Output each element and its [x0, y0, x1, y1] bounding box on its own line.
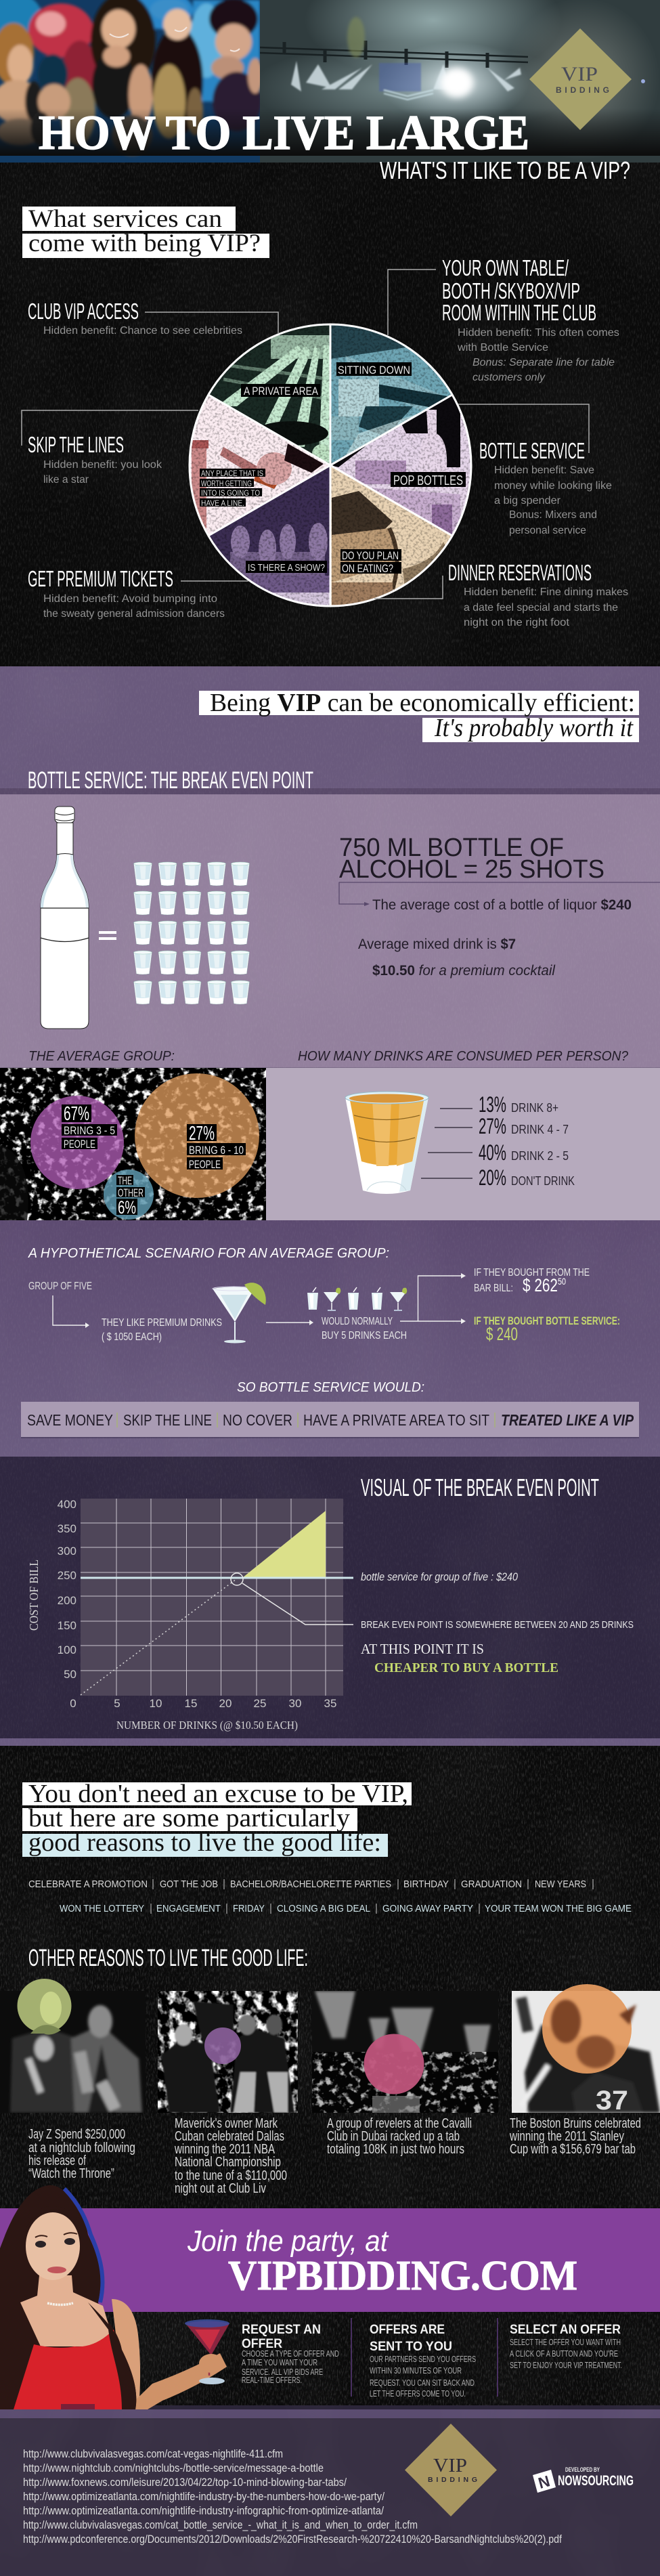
title: HOW TO LIVE LARGE: [39, 106, 529, 160]
step: request an offer: CHOOSE A TYPE OF OFFER AND: [242, 2349, 339, 2359]
callout: dinner reservations: night on the right foot: [464, 617, 570, 628]
stat: 40% drink 2-5: [428, 1140, 569, 1165]
caption: Mark Cuban: winning the 2011 NBA: [174, 2142, 275, 2157]
stat: 27% drink 4-7: [435, 1114, 569, 1138]
x axis labels: 35: [324, 1697, 336, 1710]
panel: join the party banner: VIPBIDDING.COM: [228, 2253, 577, 2299]
y axis labels: 250: [58, 1569, 76, 1582]
logo: NowSourcing: N: [536, 2472, 552, 2492]
x axis labels: 0: [70, 1697, 76, 1710]
list: reasons to celebrate: BACHELOR/BACHELORETTE PARTIES: [230, 1879, 391, 1890]
caption: Mark Cuban: night out at Club Liv: [175, 2181, 266, 2196]
heading: good reasons: You don't need an excuse to be VIP,: [28, 1780, 408, 1808]
step: five drinks each: BUY 5 DRINKS EACH: [322, 1330, 407, 1341]
stat: 750 ml bottle equals 25 shots: ALCOHOL = 25 SHOTS: [339, 855, 604, 884]
caption: Mark Cuban: Cuban celebrated Dallas: [175, 2129, 284, 2144]
callout: bottle service: [458, 404, 612, 536]
logo: NowSourcing: DEVELOPED BY: [565, 2466, 600, 2473]
text: drink cost facts: $10.50 for a premium cocktail: [372, 963, 556, 979]
header photo: women dancing: [0, 0, 263, 163]
text: sources list: http://www.foxnews.com/leisure/2013/04/22/top-10-mind-blowing-bar-tabs/: [23, 2476, 347, 2489]
text: sources list: http://www.optimizeatlanta.com/nightlife-industry-infographic-from-optimize-atlanta/: [23, 2504, 384, 2517]
x axis labels: 15: [185, 1697, 197, 1710]
outcome: bottle service: $ 240: [486, 1324, 518, 1344]
caption: Boston Bruins: [509, 2116, 641, 2157]
label: is there a show: IS THERE A SHOW?: [248, 562, 325, 574]
callout: get premium tickets: [28, 566, 248, 620]
icons: five drinks: [307, 1287, 407, 1310]
icon: cocktail glass in hand: [185, 2319, 229, 2384]
y axis labels: 400: [58, 1498, 76, 1511]
step: request an offer: A TIME YOU WANT YOUR: [242, 2358, 317, 2367]
step: five drinks each: [322, 1316, 407, 1341]
caption: Cavalli Club: totaling 108K in just two hours: [327, 2142, 464, 2157]
callout: skip the lines: [22, 410, 198, 486]
caption: Jay Z: [28, 2127, 135, 2181]
heading: how many drinks: HOW MANY DRINKS ARE CONSUMED PER PERSON?: [298, 1049, 629, 1064]
step: request an offer: REAL-TIME OFFERS.: [242, 2376, 302, 2385]
step: request an offer: [242, 2323, 339, 2385]
y axis labels: 200: [58, 1594, 76, 1607]
photo: Jay Z at nightclub: [0, 1979, 146, 2113]
logo: VIP Bidding footer diamond: BIDDING: [428, 2476, 477, 2484]
callout: get premium tickets: the sweaty general admission dancers: [43, 608, 225, 620]
text: sources list: http://www.nightclub.com/nightclubs-/bottle-service/message-a-bottle: [23, 2462, 324, 2474]
step: offers are sent to you: LET THE OFFERS COME TO YOU.: [370, 2389, 466, 2399]
caption: Cavalli Club: Club in Dubai racked up a tab: [327, 2129, 460, 2144]
caption: Boston Bruins: winning the 2011 Stanley: [509, 2129, 624, 2144]
logo: VIP Bidding footer diamond: VIP: [433, 2455, 467, 2476]
callout: your own table: customers only: [472, 372, 546, 383]
label: 67% bring 3-5: 67%: [64, 1103, 89, 1125]
label: 67% bring 3-5: [62, 1103, 117, 1151]
callout: dinner reservations: [374, 560, 628, 628]
heading: the average group: THE AVERAGE GROUP:: [28, 1049, 175, 1064]
callout: skip the lines: SKIP THE LINES: [28, 432, 124, 457]
list: reasons to celebrate: GOT THE JOB: [160, 1879, 218, 1890]
outcome: bar bill: $ 262: [523, 1275, 558, 1295]
step: offers are sent to you: OUR PARTNERS SEND YOU OFFERS: [370, 2355, 476, 2364]
heading: what services: [22, 205, 269, 258]
step: group of five: GROUP OF FIVE: [28, 1281, 92, 1292]
x axis labels: 5: [114, 1697, 120, 1710]
wedge: sitting down: [332, 325, 451, 463]
callout: club VIP access: [28, 299, 278, 337]
callout: cheaper to buy a bottle: CHEAPER TO BUY A BOTTLE: [374, 1660, 558, 1675]
label: any place worth getting into: HAVE A LINE.: [201, 498, 244, 508]
logo: VIP Bidding diamond: [529, 28, 632, 130]
callout: your own table: Hidden benefit: This often comes: [458, 327, 619, 339]
caption: Cavalli Club: [327, 2116, 472, 2157]
photo: Cavalli Club Dubai: [312, 1991, 498, 2113]
stat: 20% don't drink: [421, 1165, 575, 1190]
x axis labels: 25: [254, 1697, 266, 1710]
heading: what services: What services can: [28, 205, 222, 233]
caption: Jay Z: at a nightclub following: [28, 2141, 135, 2155]
caption: Cavalli Club: A group of revelers at the Cavalli: [327, 2116, 472, 2131]
label: do you plan on eating: DO YOU PLAN: [342, 549, 399, 562]
label: 27% bring 6-10: [187, 1123, 246, 1171]
y axis labels: 50: [64, 1668, 76, 1681]
callout: dinner reservations: a date feel special and starts the: [464, 602, 618, 614]
callout: skip the lines: like a star: [43, 474, 89, 486]
callout: your own table: Bonus: Separate line for table: [472, 357, 615, 368]
heading: economically efficient: It's probably worth it: [434, 714, 634, 742]
x axis labels: [70, 1697, 336, 1710]
step: select an offer: A CLICK OF A BUTTON AND YOU'RE: [510, 2349, 618, 2359]
callout: bottle service: Hidden benefit: Save: [494, 465, 594, 476]
y axis labels: 100: [58, 1644, 76, 1656]
callout: club VIP access: CLUB VIP ACCESS: [28, 299, 139, 324]
callout: bottle service: Bonus: Mixers and: [509, 509, 597, 521]
text: drink cost facts: The average cost of a bottle of liquor $240: [372, 897, 632, 913]
step: group of five: [28, 1281, 92, 1328]
step: select an offer: SELECT AN OFFER: [510, 2323, 621, 2337]
break even marker: [231, 1573, 353, 1625]
outcome: bar bill: BAR BILL:: [474, 1283, 513, 1294]
stat: 20% don't drink: DON'T DRINK: [511, 1174, 575, 1188]
heading: what services: come with being VIP?: [28, 230, 261, 257]
panel: benefits bar: NO COVER: [223, 1411, 292, 1429]
photo: woman with cocktail: [0, 2185, 227, 2409]
outcome: bottle service: [474, 1314, 620, 1344]
list: reasons to celebrate: YOUR TEAM WON THE BIG GAME: [485, 1903, 632, 1914]
shaded savings area: [242, 1511, 326, 1578]
panel: join the party banner: Join the party, at: [187, 2225, 389, 2258]
panel: drinks per person: [266, 1068, 660, 1220]
list: reasons to celebrate: GRADUATION: [461, 1879, 522, 1890]
photo: Boston Bruins: 37: [596, 2086, 628, 2116]
list: reasons to celebrate: WON THE LOTTERY: [60, 1903, 144, 1914]
panel: group size photo with circles: [0, 1068, 266, 1220]
panel: benefits bar: HAVE A PRIVATE AREA TO SIT: [303, 1411, 489, 1429]
equals sign: [99, 932, 116, 939]
callout: skip the lines: Hidden benefit: you look: [43, 459, 162, 471]
step: premium drinks: ( $ 1050 EACH): [102, 1331, 162, 1343]
x axis labels: 10: [150, 1697, 162, 1710]
x axis labels: 30: [289, 1697, 301, 1710]
callout: get premium tickets: Hidden benefit: Avoid bumping into: [43, 593, 217, 605]
callout: dinner reservations: Hidden benefit: Fine dining makes: [464, 586, 628, 598]
label: any place worth getting into: INTO IS GOING TO: [201, 488, 260, 498]
label: the other 6%: 6%: [118, 1197, 136, 1218]
wedge: is there a show: [203, 467, 332, 609]
label: 67% bring 3-5: BRING 3 - 5: [64, 1124, 115, 1137]
callout: club VIP access: Hidden benefit: Chance to see celebrities: [43, 325, 242, 337]
step: premium drinks: [102, 1317, 222, 1343]
y axis labels: 300: [58, 1545, 76, 1558]
pie chart: VIP services: [186, 318, 472, 609]
stat: 20% don't drink: 20%: [479, 1165, 506, 1190]
header photo: stage lights: [250, 0, 660, 163]
stat: 750 ml bottle equals 25 shots: 750 ML BOTTLE OF: [339, 834, 564, 862]
callout: your own table: YOUR OWN TABLE/: [442, 255, 569, 280]
step: request an offer: OFFER: [242, 2337, 282, 2351]
y axis labels: [58, 1498, 76, 1681]
callout: bottle service: a big spender: [494, 495, 561, 507]
label: any place worth getting into: WORTH GETTING: [201, 479, 252, 488]
wedge: a private area: [210, 325, 329, 463]
logo: VIP Bidding diamond: VIP: [561, 63, 598, 85]
list: reasons to celebrate: GOING AWAY PARTY: [382, 1903, 473, 1914]
x axis labels: 20: [219, 1697, 232, 1710]
caption: Jay Z: his release of: [28, 2153, 86, 2168]
list: reasons to celebrate: NEW YEARS: [535, 1879, 586, 1890]
callout: your own table: with Bottle Service: [457, 342, 548, 353]
label: 27% bring 6-10: BRING 6 - 10: [189, 1144, 244, 1157]
step: select an offer: SELECT THE OFFER YOU WANT WITH: [510, 2338, 621, 2347]
callout: get premium tickets: GET PREMIUM TICKETS: [28, 566, 173, 591]
note: bottle service price line: bottle service for group of five : $240: [361, 1570, 518, 1583]
flow: scenario diagram: [28, 1267, 620, 1344]
icon: liquor bottle: [41, 807, 89, 1029]
heading: other reasons: OTHER REASONS TO LIVE THE GOOD LIFE:: [28, 1945, 308, 1971]
header fade to dark: [0, 108, 660, 156]
icon grid: 25 shots: [134, 862, 249, 1004]
label: any place worth getting into: [200, 469, 265, 508]
list: reasons to celebrate: CLOSING A BIG DEAL: [277, 1903, 370, 1914]
caption: Jay Z: “Watch the Throne”: [28, 2166, 114, 2181]
step: premium drinks: THEY LIKE PREMIUM DRINKS: [102, 1317, 222, 1329]
step: offers are sent to you: WITHIN 30 MINUTES OF YOUR: [370, 2366, 462, 2376]
panel: benefits bar: [21, 1402, 639, 1438]
label: do you plan on eating: ON EATING?: [342, 562, 393, 575]
label: 27% bring 6-10: 27%: [189, 1123, 215, 1144]
list: reasons to celebrate: FRIDAY: [233, 1903, 265, 1914]
label: do you plan on eating: [340, 549, 401, 575]
panel: join the party banner: [0, 2208, 660, 2312]
text: drink cost facts: [358, 897, 632, 979]
step: five drinks each: WOULD NORMALLY: [322, 1316, 393, 1327]
heading: good reasons: but here are some particularly: [28, 1804, 350, 1832]
callout: cheaper to buy a bottle: AT THIS POINT IT IS: [361, 1641, 484, 1657]
chart: break even line chart: [27, 1498, 353, 1732]
icon: martini: [213, 1283, 266, 1344]
list: reasons to celebrate: [28, 1879, 632, 1914]
caption: Mark Cuban: Maverick's owner Mark: [175, 2116, 278, 2131]
caption: Mark Cuban: [174, 2116, 287, 2196]
text: sources list: http://www.optimizeatlanta.com/nightlife-industry-by-the-numbers-how-do-we-party/: [23, 2490, 384, 2503]
logo: NowSourcing: [533, 2466, 634, 2493]
stat: 27% drink 4-7: DRINK 4 - 7: [511, 1123, 569, 1136]
text: sources list: [23, 2447, 562, 2546]
wedge: dinner: [332, 467, 451, 605]
stat: 40% drink 2-5: DRINK 2 - 5: [511, 1149, 569, 1163]
photo: Mark Cuban and Mavericks: [158, 1991, 298, 2113]
stat: 27% drink 4-7: 27%: [479, 1114, 506, 1138]
axis title: cost of bill: COST OF BILL: [27, 1560, 41, 1631]
wedge: pop bottles: [333, 397, 470, 534]
callout: cheaper to buy a bottle: [361, 1641, 558, 1675]
heading: so bottle service would: SO BOTTLE SERVICE WOULD:: [237, 1380, 424, 1395]
label: 67% bring 3-5: PEOPLE: [64, 1138, 95, 1151]
y axis labels: 350: [58, 1522, 76, 1535]
axis title: number of drinks: NUMBER OF DRINKS (@ $10.50 EACH): [116, 1719, 298, 1732]
wedge: skip the lines: [191, 396, 329, 534]
list: reasons to celebrate: CELEBRATE A PROMOTION: [28, 1879, 148, 1890]
caption: Mark Cuban: National Championship: [175, 2155, 281, 2170]
stat: 40% drink 2-5: 40%: [479, 1140, 506, 1165]
callout: your own table: [388, 255, 619, 383]
callout: bottle service: personal service: [509, 525, 586, 536]
label: sitting down: SITTING DOWN: [338, 364, 410, 377]
label: the other 6%: [116, 1174, 145, 1218]
caption: Mark Cuban: to the tune of a $110,000: [175, 2168, 287, 2183]
outcome: bar bill: IF THEY BOUGHT FROM THE: [474, 1267, 590, 1279]
caption: Jay Z: Jay Z Spend $250,000: [28, 2127, 125, 2142]
label: the other 6%: THE: [118, 1174, 132, 1187]
list: reasons to celebrate: BIRTHDAY: [403, 1879, 449, 1890]
logo: VIP Bidding footer diamond: [405, 2424, 497, 2516]
text: sources list: http://www.clubvivalasvegas.com/cat-vegas-nightlife-411.cfm: [23, 2447, 283, 2460]
text: sources list: http://www.pdconference.org/Documents/2012/Downloads/2%20FirstResearch-%20722410%20-BarsandNightclubs%20(2).pdf: [23, 2533, 562, 2546]
text: drink cost facts: Average mixed drink is $7: [358, 937, 516, 952]
step: request an offer: SERVICE. ALL VIP BIDS ARE: [242, 2367, 323, 2377]
text: sources list: http://www.clubvivalasvegas.com/cat_bottle_service_-_what_it_is_and_when_to_order_it.cfm: [23, 2518, 418, 2531]
label: any place worth getting into: ANY PLACE THAT IS: [201, 469, 263, 478]
outcome: bar bill: [474, 1267, 590, 1295]
panel: benefits bar: SAVE MONEY: [27, 1411, 113, 1429]
outcome: bar bill: 50: [558, 1276, 566, 1287]
label: pop bottles: POP BOTTLES: [393, 473, 463, 488]
step: offers are sent to you: SENT TO YOU: [370, 2340, 452, 2354]
step: offers are sent to you: OFFERS ARE: [370, 2323, 445, 2337]
list: reasons to celebrate: ENGAGEMENT: [156, 1903, 221, 1914]
heading: good reasons: good reasons to live the good life:: [28, 1828, 381, 1857]
heading: hypothetical scenario: A HYPOTHETICAL SCENARIO FOR AN AVERAGE GROUP:: [28, 1246, 389, 1261]
step: offers are sent to you: REQUEST. YOU CAN SIT BACK AND: [370, 2378, 475, 2388]
step: offers are sent to you: [370, 2323, 476, 2399]
logo: VIP Bidding diamond: BIDDING: [556, 85, 609, 95]
label: the other 6%: OTHER: [118, 1186, 144, 1199]
heading: economically efficient: Being VIP can be economically efficient:: [210, 689, 635, 717]
panel: benefits bar: TREATED LIKE A VIP: [501, 1411, 634, 1429]
stat: 13% drink 8+: [440, 1092, 558, 1117]
y axis labels: 150: [58, 1619, 76, 1632]
stat: 750 ml bottle equals 25 shots: [339, 834, 660, 906]
panel: benefits bar: SKIP THE LINE: [123, 1411, 212, 1429]
step: select an offer: [510, 2323, 622, 2370]
stat: 13% drink 8+: DRINK 8+: [511, 1101, 558, 1115]
step: request an offer: REQUEST AN: [242, 2323, 321, 2337]
heading: economically efficient: [199, 689, 639, 742]
callout: bottle service: money while looking like: [494, 480, 612, 492]
label: 27% bring 6-10: PEOPLE: [189, 1158, 221, 1171]
icon: filled shot glass: [345, 1092, 428, 1194]
heading: bottle service break even point: BOTTLE SERVICE: THE BREAK EVEN POINT: [28, 767, 313, 794]
heading: good reasons: [22, 1780, 412, 1857]
label: a private area: A PRIVATE AREA: [244, 385, 319, 398]
stat: 13% drink 8+: 13%: [479, 1092, 506, 1117]
photo: Boston Bruins: [512, 1984, 660, 2116]
